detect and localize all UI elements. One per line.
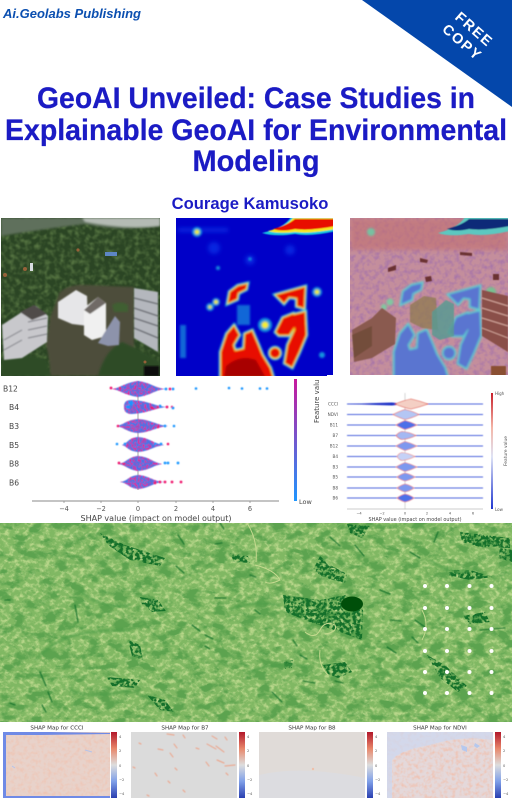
beeswarm tick labels: −2: [96, 505, 106, 513]
SHAP map for NDVI: 2: [503, 749, 505, 753]
violin feature labels: [328, 402, 338, 500]
violin feature labels: B7: [332, 433, 338, 438]
violin feature labels: B3: [332, 464, 338, 470]
beeswarm tick labels: −4: [59, 505, 69, 513]
violin colour bar text: [495, 392, 507, 511]
SHAP map for B8: 0: [375, 764, 378, 768]
beeswarm feature labels: B3: [9, 422, 19, 431]
SHAP map for CCCI: 4: [119, 735, 122, 739]
heatmap overlay on photo: [350, 217, 510, 378]
violin axis and ticks: −2: [379, 512, 385, 516]
violin colour bar text: Low: [495, 507, 504, 512]
violin rows: [347, 393, 483, 509]
author: Courage Kamusoko: [172, 194, 328, 213]
violin feature labels: B12: [330, 444, 338, 448]
SHAP map for B8: SHAP Map for B8: [288, 726, 336, 732]
beeswarm feature labels: B5: [9, 441, 19, 450]
SHAP map for B8: 2: [375, 749, 377, 753]
violin feature labels: B8: [332, 486, 338, 490]
beeswarm colour bar text: Feature valu: [313, 380, 321, 423]
beeswarm feature labels: B4: [9, 403, 19, 412]
violin colour bar text: Feature value: [503, 436, 509, 466]
beeswarm axis label: SHAP value (impact on model output): [80, 514, 232, 523]
dark forest patches: [100, 524, 512, 712]
violin feature labels: B11: [330, 422, 338, 428]
SHAP violin plot: [327, 375, 512, 523]
beeswarm colour bar text: Low: [299, 498, 312, 506]
title: Modeling: [192, 145, 320, 178]
violin feature labels: NDVI: [328, 412, 338, 417]
SHAP map for B7: −2: [247, 778, 252, 782]
beeswarm tick labels: 2: [174, 505, 178, 513]
SHAP map for B8: 4: [375, 735, 378, 739]
green vegetation map: [0, 523, 512, 722]
SHAP map for NDVI: SHAP Map for NDVI: [413, 726, 467, 732]
SHAP map for B7: 0: [247, 764, 250, 768]
SHAP map for B7: [131, 726, 253, 798]
SHAP map for CCCI: 2: [119, 749, 121, 753]
free copy corner ribbon: COPY: [439, 21, 485, 64]
beeswarm tick labels: [59, 505, 252, 513]
SHAP map for B8: [259, 726, 381, 798]
SHAP map for B7: 4: [247, 735, 250, 739]
violin feature labels: CCCI: [328, 402, 338, 406]
SHAP map for NDVI: −2: [503, 778, 508, 782]
violin axis and ticks: −4: [356, 512, 362, 516]
violin feature labels: B4: [332, 454, 338, 459]
publisher name: Ai.Geolabs Publishing: [2, 6, 141, 21]
title: Explainable GeoAI for Environmental: [5, 114, 507, 147]
beeswarm swarms: [110, 381, 268, 489]
SHAP map for CCCI: 0: [119, 764, 122, 768]
SHAP map for B7: −4: [247, 792, 253, 796]
SHAP map for B7: 2: [247, 749, 249, 753]
violin axis and ticks: 0: [404, 512, 407, 516]
SHAP map for NDVI: [387, 726, 509, 798]
SHAP map for NDVI: 0: [503, 764, 506, 768]
violin feature labels: B5: [332, 474, 338, 480]
beeswarm feature labels: B12: [3, 384, 18, 394]
flood aerial photo: [1, 218, 160, 376]
title: GeoAI Unveiled: Case Studies in: [37, 82, 475, 115]
SHAP map for CCCI: −2: [119, 778, 124, 782]
SHAP map for B8: −4: [375, 792, 381, 796]
beeswarm zero line and axis: [32, 381, 279, 503]
SHAP map for CCCI: −4: [119, 792, 125, 796]
beeswarm tick labels: 6: [248, 505, 252, 513]
light river lines: [247, 523, 426, 675]
SHAP map for B8: −2: [375, 778, 380, 782]
beeswarm feature labels: B6: [9, 478, 19, 488]
SHAP map for B7: SHAP Map for B7: [161, 726, 209, 732]
SHAP map for NDVI: 4: [503, 735, 506, 739]
beeswarm tick labels: 0: [136, 505, 140, 513]
free copy corner ribbon: FREE: [452, 9, 496, 51]
violin colour bar: [491, 393, 493, 509]
beeswarm tick labels: 4: [211, 505, 215, 513]
attention heatmap: [176, 217, 336, 378]
beeswarm feature labels: [3, 384, 19, 488]
beeswarm colour bar text: [299, 380, 321, 506]
title: [5, 82, 507, 178]
SHAP map for CCCI: [3, 726, 125, 798]
darkest forest blob: [341, 596, 363, 612]
free copy corner ribbon: [362, 0, 512, 107]
beeswarm feature labels: B8: [9, 460, 19, 468]
violin axis label: SHAP value (impact on model output): [368, 517, 462, 523]
beeswarm colour bar: [294, 379, 297, 501]
violin axis and ticks: 6: [472, 512, 475, 516]
violin colour bar text: High: [495, 391, 505, 396]
violin axis and ticks: 4: [449, 512, 452, 516]
mid-green ridges: [35, 560, 470, 695]
violin feature labels: B6: [332, 496, 338, 500]
dark dashes: [5, 523, 505, 712]
white sample dots: [423, 584, 494, 695]
SHAP map for CCCI: SHAP Map for CCCI: [30, 726, 84, 732]
violin axis and ticks: 2: [426, 512, 428, 516]
violin axis and ticks: [347, 509, 483, 516]
SHAP beeswarm plot: [3, 379, 321, 523]
SHAP map for NDVI: −4: [503, 792, 509, 796]
